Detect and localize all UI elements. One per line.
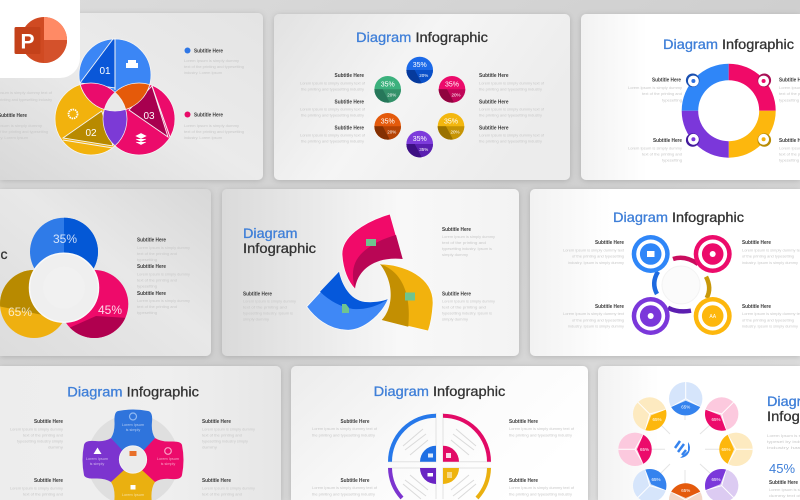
text: bottom right: text of the printing and (202, 492, 242, 496)
legend: pink subtitle: text of the printing and typesetting (184, 129, 244, 134)
text: left middle: the printing and typesetting industry (301, 112, 364, 118)
text: right middle: the printing and typesetting industry (479, 112, 542, 118)
text: second: typesetting (137, 284, 157, 288)
stat subtitle (769, 480, 800, 498)
text: right bottom: Lorem Ipsum is simply dummy (442, 298, 495, 304)
panel: petal wheel slide (598, 366, 800, 500)
text: first: Subtitle Here (137, 238, 166, 244)
stat subtitle: Subtitle Here (769, 480, 798, 486)
text: right middle: Lorem Ipsum is simply dummy text of (479, 106, 545, 112)
venn diagram (55, 38, 175, 155)
text: top left: Subtitle Here (340, 419, 370, 425)
circle: yellow: 20% (450, 129, 460, 134)
legend: blue subtitle (184, 48, 244, 75)
legend: blue subtitle: Lorem Ipsum is simply dummy (184, 58, 239, 63)
text: bottom left: industry. Ipsum is simply dummy (568, 324, 624, 328)
legend: blue subtitle: text of the printing and typesetting (184, 64, 244, 69)
title: Diagram Infographic (613, 209, 744, 225)
petal: top right pink (698, 390, 745, 438)
badge: yellow (758, 133, 771, 147)
text: top right: typesetting industry simply (202, 438, 248, 444)
flower diagram: is simply (126, 428, 140, 432)
title: Diagram Infographic (356, 29, 488, 45)
text: top left: typesetting industry simply (17, 438, 63, 444)
text: top left: typesetting (662, 98, 682, 102)
text: first (137, 238, 190, 262)
title (767, 393, 800, 424)
label: right value: 65% (721, 447, 731, 452)
text: left bottom: simply dummy (243, 316, 269, 322)
text: bottom right: typesetting (779, 158, 799, 162)
text: bottom left: Lorem Ipsum is simply dummy text (563, 311, 625, 316)
text: top right: typesetting (779, 98, 799, 102)
petal: bottom left blue (628, 464, 672, 500)
text: top left (563, 240, 625, 265)
text: second: Lorem Ipsum is simply dummy (137, 272, 190, 276)
text: left middle: Subtitle Here (334, 100, 364, 106)
label: top right value: 65% (711, 417, 721, 422)
panel: four ring nodes slide (530, 189, 800, 356)
venn diagram: 03 (143, 111, 155, 122)
circle: yellow: 35% (444, 118, 458, 125)
text: bottom left: Subtitle Here (595, 304, 624, 310)
circle: pink: 20% (451, 92, 461, 97)
flower diagram: Lorem Ipsum (86, 457, 108, 461)
label: top left value: 65% (652, 417, 662, 422)
text: top left: Lorem Ipsum is simply dummy text (563, 248, 625, 252)
text: bottom right: Subtitle Here (202, 478, 231, 484)
text: bottom right: Subtitle Here (509, 478, 538, 484)
text: top right (779, 78, 800, 102)
text: left bottom: Subtitle Here (243, 292, 272, 298)
text: top right: the printing and typesetting industry (509, 432, 572, 438)
circle: green: 35% (381, 81, 395, 88)
text: bottom right: industry. Ipsum is simply dummy (742, 324, 798, 328)
flower diagram: is simply (161, 462, 175, 466)
circle: blue: 35% (413, 62, 427, 69)
quadrant diagram (388, 413, 491, 499)
text: bottom right: Lorem Ipsum is simply dummy (202, 486, 255, 490)
panel: donut slide (581, 14, 800, 180)
text: top right (509, 419, 575, 438)
text: bottom left: Lorem Ipsum is simply dummy text of (312, 485, 378, 490)
text: second: text of the printing and (137, 278, 177, 282)
title (243, 225, 316, 256)
icon: powerpoint logo: P (20, 30, 35, 54)
legend: blue subtitle: Subtitle Here (194, 48, 223, 54)
circle: orange: 20% (387, 129, 396, 134)
text: top right (202, 419, 255, 450)
text: top left: Lorem Ipsum is simply dummy (628, 85, 682, 90)
text: right top: simply dummy (442, 252, 468, 257)
circle: purple: 35% (413, 136, 427, 143)
center hub (665, 429, 705, 469)
text: first: typesetting (137, 257, 157, 262)
node: purple (632, 297, 670, 335)
text: right top: typesetting industry. Ipsum is (442, 246, 492, 251)
text: first: Lorem Ipsum is simply dummy (137, 245, 190, 250)
text: bottom right: of the printing and typesetting (742, 318, 794, 322)
text: bottom left (312, 478, 378, 496)
node: blue (632, 235, 670, 273)
badge: pink (758, 74, 771, 87)
text: right top: Lorem Ipsum is simply dummy text of (479, 80, 545, 86)
label: left value: 65% (640, 447, 649, 452)
text: right top (442, 227, 495, 257)
petal: top left yellow (626, 390, 673, 438)
text: right bottom (442, 292, 495, 322)
flower diagram: Lorem Ipsum (157, 457, 179, 461)
text: right top (479, 73, 545, 92)
text: top left: Subtitle Here (34, 419, 63, 425)
circle: pink (439, 76, 465, 103)
spokes (650, 382, 721, 484)
connectors (654, 258, 709, 311)
panel: curved blades slide (222, 189, 519, 356)
text: bottom right (509, 478, 575, 496)
text: first: text of the printing and (137, 251, 177, 256)
flower diagram: Lorem Ipsum (122, 493, 144, 497)
legend: pink subtitle (184, 112, 244, 140)
text: bottom right (202, 478, 255, 496)
text: left top: Lorem Ipsum is simply dummy text of (300, 80, 366, 86)
title: Diagram (243, 225, 298, 241)
text: bottom left: typesetting (662, 158, 682, 162)
circle: pink: 35% (445, 81, 459, 88)
text: right bottom: Subtitle Here (442, 292, 471, 298)
text: top left: Subtitle Here (652, 78, 681, 84)
circle: purple: 35% (419, 147, 428, 152)
text: left top: the printing and typesetting industry (301, 86, 364, 92)
text: top right: dummy (202, 444, 217, 450)
legend: blue subtitle: industry. Lorem Ipsum (184, 70, 223, 75)
circle: green (374, 76, 401, 103)
stat: 45%: 45% (769, 461, 795, 476)
text: top left: of the printing and typesetting (572, 254, 624, 258)
text: right top: text of the printing and (442, 240, 486, 245)
text: top left: the printing and typesetting industry (312, 432, 375, 438)
flower diagram (82, 410, 184, 500)
text: bottom left: the printing and typesetting industry (312, 492, 375, 496)
text: top right: Subtitle Here (509, 419, 538, 425)
text: bottom left: Lorem Ipsum is simply dummy (628, 146, 682, 150)
text: right top: Subtitle Here (442, 227, 471, 233)
legend: pink subtitle: Lorem Ipsum is simply dummy (184, 123, 239, 128)
petal: top blue: 65% (681, 405, 690, 410)
circle: orange: 35% (381, 118, 395, 125)
stat subtitle: dummy text of the (769, 493, 800, 498)
label: bottom value: 65% (681, 488, 690, 493)
petal: bottom orange (669, 483, 702, 500)
text: third: Subtitle Here (137, 291, 166, 297)
body text (767, 433, 800, 450)
text: top left (312, 419, 378, 438)
text: top left: text of the printing and (642, 91, 682, 96)
text: bottom left: of the printing and typesetting (572, 318, 624, 322)
panel: quadrant circle slide (291, 366, 588, 500)
title: Infographic (243, 240, 316, 256)
text: top left: Lorem Ipsum is simply dummy text of (312, 426, 378, 431)
circle: orange (374, 113, 401, 140)
petal: right yellow (719, 433, 753, 466)
blade: yellow (380, 264, 433, 331)
text: left bottom: the printing and typesetting industry (301, 138, 364, 144)
circle: green: 20% (387, 92, 396, 97)
title: Diagram Infographic (67, 384, 199, 400)
text: right bottom: Lorem Ipsum is simply dummy text of (479, 132, 545, 138)
text: third: text of the printing and (137, 304, 177, 309)
panel: six circles slide (274, 14, 570, 180)
venn diagram: 01 (99, 66, 111, 77)
text: right bottom: text of the printing and (442, 304, 486, 310)
text: left top (300, 73, 366, 92)
text: bottom left: Lorem Ipsum is simply dummy (10, 486, 63, 490)
text: left bottom: Lorem Ipsum is simply dummy (243, 298, 296, 304)
text: top right: text of the printing and (202, 432, 242, 438)
text: right middle (479, 100, 545, 118)
text: third: typesetting (137, 310, 157, 315)
text: bottom right: the printing and typesetting industry (509, 492, 572, 496)
text: third: Lorem Ipsum is simply dummy (137, 298, 190, 303)
text: second: Subtitle Here (137, 264, 166, 270)
text: left bottom (243, 292, 296, 322)
text: right top: the printing and typesetting industry (479, 86, 542, 92)
text: right bottom: simply dummy (442, 316, 468, 322)
text: right bottom: the printing and typesetting industry (479, 138, 542, 144)
blade: blue (307, 272, 388, 330)
text: top right: Subtitle Here (202, 419, 231, 425)
petal: bottom right purple (700, 464, 744, 500)
text: right bottom (479, 126, 545, 144)
title: Diagram Infographic (374, 383, 505, 399)
blade: pink (342, 214, 403, 289)
text: right top: Lorem Ipsum is simply dummy (442, 234, 495, 239)
text: bottom left: text of the printing and (23, 492, 63, 496)
percent circles (0, 218, 128, 345)
text: left bottom (300, 126, 366, 144)
powerpoint badge panel (0, 0, 80, 78)
percent circles: 45% (98, 303, 122, 317)
text: right bottom: typesetting industry. Ipsum is (442, 310, 492, 316)
text: top left: text of the printing and (23, 432, 63, 438)
flower diagram: Lorem Ipsum (122, 423, 144, 427)
text: left top: Subtitle Here (334, 73, 364, 79)
node: yellow: AA (709, 314, 717, 320)
text: bottom left (563, 304, 625, 328)
text: bottom right (742, 304, 800, 328)
left text block (0, 90, 53, 140)
text: bottom left (10, 478, 63, 496)
text: left bottom: typesetting industry. Ipsum is (243, 310, 293, 316)
text: third (137, 291, 190, 315)
text: left bottom: Lorem Ipsum is simply dummy text of (300, 132, 366, 138)
badge: purple (686, 133, 700, 147)
text: bottom right (779, 138, 800, 162)
text: bottom left: Subtitle Here (653, 138, 682, 144)
text: top left: industry. Ipsum is simply dummy (568, 260, 624, 265)
circle: purple (406, 131, 433, 157)
badge: blue (686, 74, 700, 87)
venn diagram: 02 (85, 128, 97, 139)
label: bottom left value: 65% (651, 477, 661, 482)
center circle (662, 266, 700, 304)
title: Diagram Infographic (663, 36, 794, 52)
text: bottom right: Subtitle Here (742, 304, 771, 310)
percent circles: 35% (53, 232, 77, 246)
panel: four petal flower slide (0, 366, 281, 500)
percent circles: 65% (8, 305, 32, 319)
node: yellow (694, 297, 732, 335)
text: bottom left: Subtitle Here (34, 478, 63, 484)
circle: blue: 20% (419, 73, 428, 78)
text: top right: Lorem Ipsum is simply dummy text of (509, 426, 575, 431)
text: top right: industry. Ipsum is simply dummy (742, 260, 798, 265)
text: top right (742, 240, 800, 265)
text: left bottom: Subtitle Here (334, 126, 364, 132)
text: bottom left (628, 138, 682, 162)
panel: three percent circles slide (0, 189, 211, 356)
text: right bottom: Subtitle Here (479, 126, 509, 132)
flower diagram: is simply (90, 462, 104, 466)
text: top left (628, 78, 682, 102)
text: bottom right: Lorem Ipsum is simply dummy text of (509, 485, 575, 490)
circle: blue (406, 57, 433, 83)
text: left middle: Lorem Ipsum is simply dummy text of (300, 106, 366, 112)
text: top left: dummy (48, 444, 63, 450)
panel: three-circle venn slide (0, 13, 263, 180)
text: top right: Lorem Ipsum is simply dummy (202, 426, 255, 432)
text: bottom left: text of the printing and (642, 152, 682, 156)
text: top left: Subtitle Here (595, 240, 624, 246)
circle: yellow (438, 113, 464, 140)
text: bottom left: Subtitle Here (340, 478, 370, 484)
text: right middle: Subtitle Here (479, 100, 509, 106)
text: left middle (300, 100, 366, 118)
node: pink (694, 235, 732, 273)
label: bottom right value: 65% (711, 477, 721, 482)
petal: left pink (618, 433, 652, 466)
donut chart (682, 64, 776, 158)
text: top left: Lorem Ipsum is simply dummy (10, 426, 63, 432)
text: left bottom: text of the printing and (243, 304, 287, 310)
text: top left (10, 419, 63, 450)
text: right top: Subtitle Here (479, 73, 509, 79)
legend: pink subtitle: industry. Lorem Ipsum (184, 135, 223, 140)
text: top right: Subtitle Here (742, 240, 771, 246)
legend: pink subtitle: Subtitle Here (194, 112, 223, 118)
text: top right: of the printing and typesetting (742, 254, 794, 258)
text: second (137, 264, 190, 288)
petal: top blue (669, 382, 702, 415)
